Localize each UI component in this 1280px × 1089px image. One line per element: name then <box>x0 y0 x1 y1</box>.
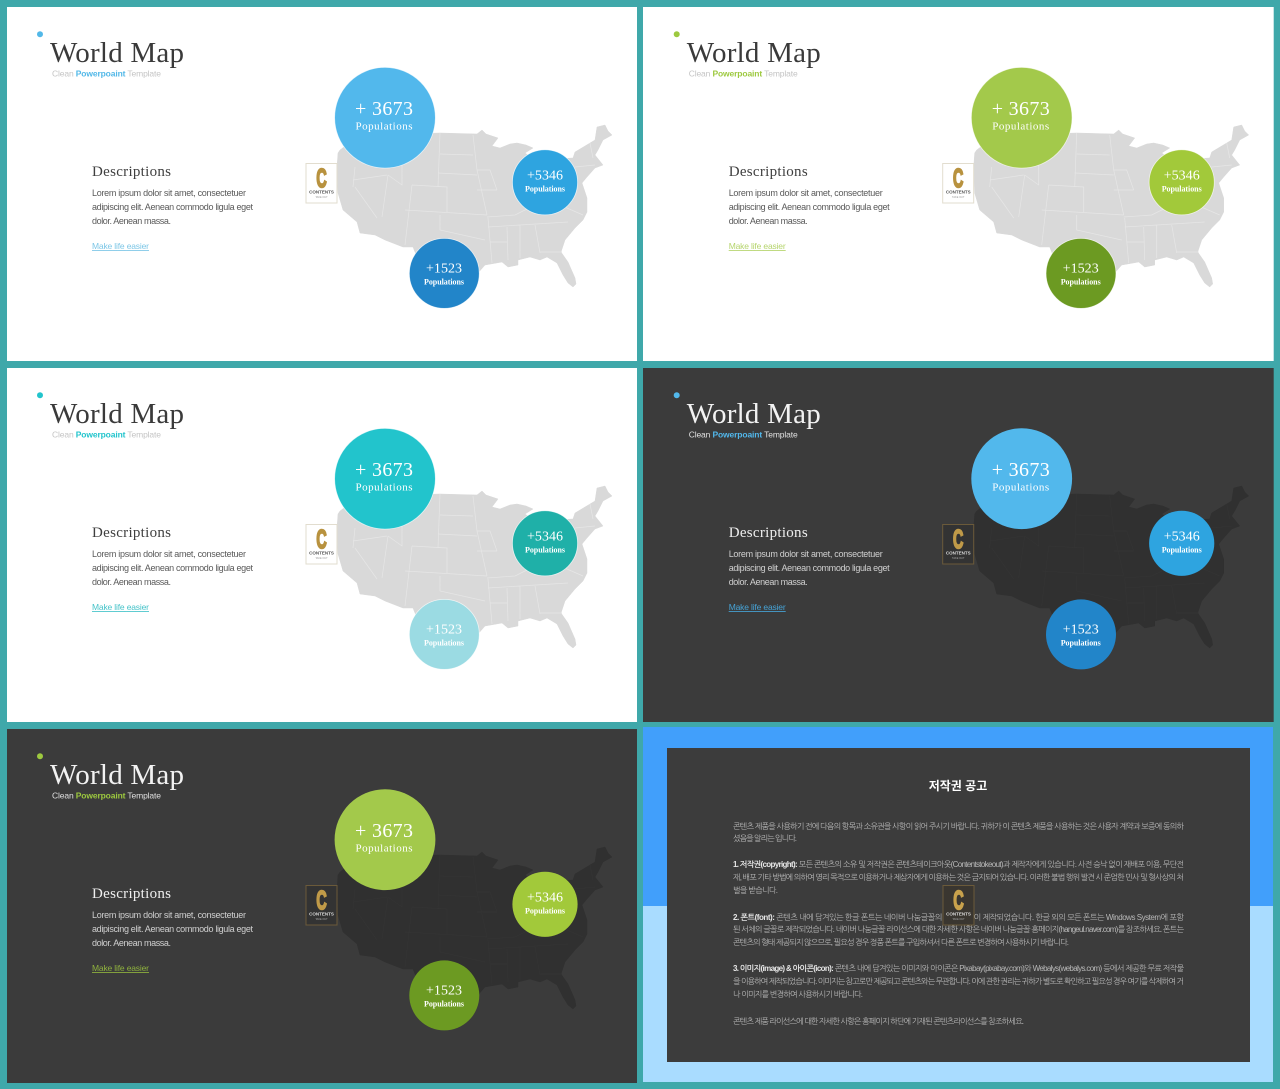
logo badge: TAKE OUT <box>952 557 965 560</box>
circle: 1523 <box>1046 238 1116 308</box>
panel: slide 4 blue dark <box>643 368 1274 722</box>
logo badge: CONTENTS <box>946 550 971 556</box>
circle: 1523: +1523 <box>426 984 462 998</box>
circle: 3673 <box>335 789 435 890</box>
subtitle: Clean Powerpoaint Template <box>52 68 161 78</box>
circle: 5346: Populations <box>525 546 565 555</box>
link: Make life easier <box>92 602 149 612</box>
logo badge: TAKE OUT <box>315 196 328 199</box>
heading: World Map <box>687 398 821 430</box>
circle: 5346: Populations <box>525 185 565 194</box>
logo badge: C <box>953 165 963 193</box>
circle: 5346 <box>512 511 578 576</box>
circle: 3673 <box>971 428 1072 529</box>
circle: 1523: Populations <box>424 278 464 286</box>
description body: Lorem ipsum dolor sit amet, consectetuer <box>92 188 246 198</box>
circle: 3673: + 3673 <box>992 459 1050 481</box>
description heading: Descriptions <box>729 164 808 180</box>
circle: 3673: + 3673 <box>355 820 413 842</box>
map <box>337 486 612 661</box>
accent dot <box>37 753 43 759</box>
logo badge <box>943 886 974 925</box>
description heading: Descriptions <box>92 164 171 180</box>
accent dot <box>674 31 680 37</box>
circle: 5346 <box>512 150 578 215</box>
heading: World Map <box>50 37 184 69</box>
description body <box>729 188 890 226</box>
logo badge: TAKE OUT <box>952 196 965 199</box>
circle: 3673 <box>335 67 435 168</box>
notice section 2 <box>733 913 1184 947</box>
description body <box>92 549 253 587</box>
circle: 5346 <box>1149 150 1214 215</box>
description heading: Descriptions <box>729 525 808 541</box>
panel: slide 1 blue light <box>7 7 637 361</box>
logo badge <box>306 524 337 564</box>
logo badge: CONTENTS <box>309 912 334 916</box>
heading: World Map <box>50 398 184 430</box>
panel: slide 3 teal light <box>7 368 637 722</box>
link: Make life easier <box>729 602 786 612</box>
notice section 1: 1. 저작권(copyright): 모든 콘텐츠의 소유 및 저작권은 콘텐츠테이크아웃(Contentstokeout)과 제작자에게 있습니다. 사전 승낙 없이 재배포 이용, 무단전 <box>733 860 1184 869</box>
subtitle: Clean Powerpoaint Template <box>52 430 161 440</box>
notice intro <box>733 822 1184 843</box>
logo badge: TAKE OUT <box>315 557 328 560</box>
notice section 2: 2. 폰트(font): 콘텐츠 내에 담겨있는 한글 폰트는 네이버 나눔글꼴의 저작권 없이 제작되었습니다. 한글 외의 모든 폰트는 Windows System에 포함 <box>733 913 1184 922</box>
description body: adipiscing elit. Aenean commodo ligula eget <box>729 202 890 212</box>
heading: World Map <box>687 37 821 69</box>
subtitle: Clean Powerpoaint Template <box>52 790 161 800</box>
circle: 1523: +1523 <box>1063 262 1099 276</box>
circle: 5346: +5346 <box>1164 530 1200 544</box>
notice section 2: 된 서체의 글꼴로 제작되었습니다. 네이버 나눔글꼴 라이선스에 대한 자세한 사항은 네이버 나눔글꼴 홈페이지(hangeul.naver.com)를 참조하세요. 폰트는 <box>733 925 1184 934</box>
notice section 2: 콘텐츠의 형태 제공되지 않으므로, 필요성 경우 정품 폰트를 구입하셔서 다른 폰트로 변경하여 사용하시기 바랍니다. <box>733 938 1069 947</box>
description body: Lorem ipsum dolor sit amet, consectetuer <box>729 549 883 559</box>
map <box>974 125 1249 300</box>
logo badge <box>943 524 974 564</box>
circle: 5346: Populations <box>1162 546 1202 555</box>
circle: 1523: Populations <box>424 638 464 648</box>
notice section 3: 3. 이미지(image) & 아이콘(icon): 콘텐츠 내에 담겨있는 이미지와 아이콘은 Pixabay(pixabay.com)와 Webalys(webalys.com) 등에서 제공한 무료 저작물 <box>733 964 1184 973</box>
circle: 3673: + 3673 <box>355 98 413 120</box>
circle: 5346: +5346 <box>1164 168 1200 184</box>
logo badge: CONTENTS <box>946 912 971 916</box>
description body: adipiscing elit. Aenean commodo ligula eget <box>92 563 253 573</box>
description body <box>92 188 253 226</box>
description heading: Descriptions <box>92 886 171 902</box>
panel: slide 5 green dark <box>7 729 637 1083</box>
circle: 1523: +1523 <box>426 262 462 276</box>
circle: 3673: Populations <box>356 842 412 854</box>
circle: 1523: Populations <box>1061 638 1101 648</box>
map <box>337 125 612 300</box>
description body <box>729 549 890 587</box>
logo badge: C <box>953 887 964 915</box>
panel: slide 2 green light <box>643 7 1274 361</box>
description body <box>92 910 253 948</box>
description body: adipiscing elit. Aenean commodo ligula eget <box>92 924 253 934</box>
link: Make life easier <box>92 963 149 973</box>
description body: adipiscing elit. Aenean commodo ligula eget <box>729 563 890 573</box>
circle: 5346: +5346 <box>527 530 563 544</box>
circle: 1523: Populations <box>424 1000 464 1008</box>
panel: copyright notice <box>643 727 1273 1082</box>
logo badge: C <box>316 165 327 193</box>
notice section 3 <box>733 964 1184 999</box>
circle: 1523 <box>409 960 479 1030</box>
logo badge: C <box>316 526 327 554</box>
accent dot <box>674 392 680 398</box>
circle: 5346 <box>512 872 578 937</box>
description body: Lorem ipsum dolor sit amet, consectetuer <box>729 188 883 198</box>
notice section 1: 벌을 받습니다. <box>733 886 778 895</box>
description body: dolor. Aenean massa. <box>92 216 171 226</box>
subtitle: Clean Powerpoaint Template <box>689 430 798 440</box>
map <box>337 847 612 1022</box>
notice section 1: 재, 배포 기타 방법에 의하여 영리 목적으로 이용하거나 제삼자에게 이용하는 것은 금지되어 있습니다. 이러한 불법 행위 발견 시 준엄한 민사 및 형사상의 처 <box>733 873 1184 882</box>
circle: 3673 <box>971 67 1072 168</box>
notice section 3: 을 이용하여 제작되었습니다. 이미지는 참고로만 제공되고 콘텐츠와는 무관합니다. 이에 관한 권리는 귀하가 별도로 확인하고 필요성 경우 여기를 삭제하여 거 <box>733 977 1184 986</box>
notice section 3: 나 이미지를 변경하여 사용하시기 바랍니다. <box>733 990 863 999</box>
logo badge: CONTENTS <box>946 190 971 194</box>
description heading: Descriptions <box>92 525 171 541</box>
description body: dolor. Aenean massa. <box>92 938 171 948</box>
logo badge: CONTENTS <box>309 190 334 194</box>
circle: 1523 <box>409 599 479 669</box>
notice intro: 콘텐츠 제품을 사용하기 전에 다음의 항목과 소유권을 사항이 읽어 주시기 바랍니다. 귀하가 이 콘텐츠 제품을 사용하는 것은 사용자 계약과 보증에 동의하 <box>733 822 1184 831</box>
circle: 5346: +5346 <box>527 168 563 184</box>
link: Make life easier <box>729 241 786 251</box>
heading: World Map <box>50 759 184 791</box>
circle: 3673: + 3673 <box>992 98 1050 120</box>
logo badge: TAKE OUT <box>952 918 965 921</box>
circle: 3673: Populations <box>992 120 1049 132</box>
description body: Lorem ipsum dolor sit amet, consectetuer <box>92 549 246 559</box>
description body: dolor. Aenean massa. <box>729 216 808 226</box>
logo badge <box>306 886 337 925</box>
circle: 1523: Populations <box>1061 278 1101 286</box>
description body: Lorem ipsum dolor sit amet, consectetuer <box>92 910 246 920</box>
circle: 5346 <box>1149 511 1214 576</box>
notice intro: 셨음을 알리는 입니다. <box>733 834 797 843</box>
accent dot <box>37 392 43 398</box>
logo badge: TAKE OUT <box>315 918 328 921</box>
circle: 3673: Populations <box>356 482 412 494</box>
notice footer: 콘텐츠 제품 라이선스에 대한 자세한 사항은 홈페이지 하단에 기재된 콘텐츠라이선스를 참조하세요. <box>733 1017 1024 1026</box>
circle: 5346: +5346 <box>527 890 563 906</box>
circle: 3673: + 3673 <box>355 459 413 481</box>
circle: 1523: +1523 <box>426 622 462 638</box>
description body: dolor. Aenean massa. <box>92 577 171 587</box>
circle: 1523: +1523 <box>1063 622 1099 638</box>
notice section 1 <box>733 860 1184 895</box>
map <box>974 486 1249 661</box>
notice heading: 저작권 공고 <box>929 778 987 793</box>
circle: 3673 <box>335 428 435 529</box>
circle: 3673: Populations <box>356 120 412 132</box>
description body: dolor. Aenean massa. <box>729 577 808 587</box>
circle: 5346: Populations <box>1162 185 1202 194</box>
logo badge: C <box>953 526 963 554</box>
circle: 3673: Populations <box>992 482 1049 494</box>
logo badge <box>943 164 974 203</box>
circle: 1523 <box>409 238 479 308</box>
circle: 5346: Populations <box>525 907 565 916</box>
description body: adipiscing elit. Aenean commodo ligula eget <box>92 202 253 212</box>
subtitle: Clean Powerpoaint Template <box>689 68 798 78</box>
accent dot <box>37 31 43 37</box>
circle: 1523 <box>1046 599 1116 669</box>
link: Make life easier <box>92 241 149 251</box>
logo badge: CONTENTS <box>309 550 334 556</box>
logo badge <box>306 164 337 203</box>
logo badge: C <box>316 887 327 915</box>
